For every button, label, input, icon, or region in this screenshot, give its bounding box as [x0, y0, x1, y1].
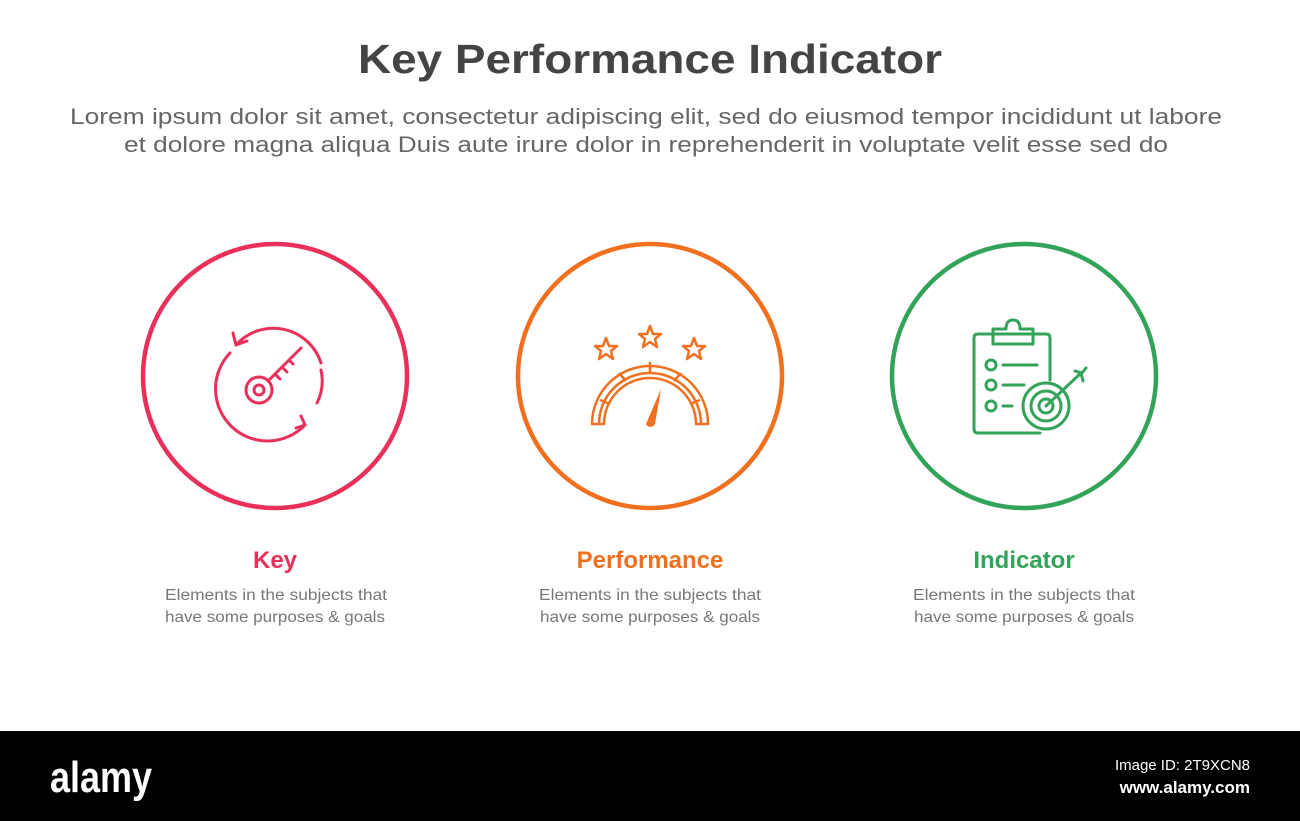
icon: clipboard with target	[974, 320, 1086, 433]
icon: key with rotating arrows	[216, 328, 322, 441]
image id: Image ID: 2T9XCN8	[1115, 757, 1250, 774]
label: key: Key	[253, 547, 298, 574]
description: indicator: Elements in the subjects that	[913, 587, 1136, 604]
panel: key	[143, 244, 407, 626]
subtitle: Lorem ipsum dolor sit amet, consectetur adipiscing elit, sed do eiusmod tempor incididunt ut labore	[70, 104, 1222, 129]
circle: performance	[518, 244, 782, 508]
description: key	[165, 587, 388, 626]
description: key: have some purposes & goals	[165, 609, 385, 626]
description: indicator	[913, 587, 1136, 626]
description: performance: have some purposes & goals	[540, 609, 760, 626]
icon: gauge with stars	[592, 326, 708, 424]
label: performance: Performance	[577, 547, 723, 574]
description: performance	[539, 587, 762, 626]
circle: indicator	[892, 244, 1156, 508]
footer bar	[0, 731, 1300, 821]
label: indicator: Indicator	[973, 547, 1075, 574]
description: key: Elements in the subjects that	[165, 587, 388, 604]
subtitle: et dolore magna aliqua Duis aute irure dolor in reprehenderit in voluptate velit esse sed do	[124, 132, 1168, 157]
subtitle	[70, 104, 1222, 157]
panel: performance	[518, 244, 782, 626]
logo: alamy: alamy	[50, 753, 152, 802]
circle: key	[143, 244, 407, 508]
panel: indicator	[892, 244, 1156, 626]
title: Key Performance Indicator	[358, 36, 942, 82]
description: indicator: have some purposes & goals	[914, 609, 1134, 626]
description: performance: Elements in the subjects that	[539, 587, 762, 604]
website: www.alamy.com	[1119, 778, 1250, 797]
